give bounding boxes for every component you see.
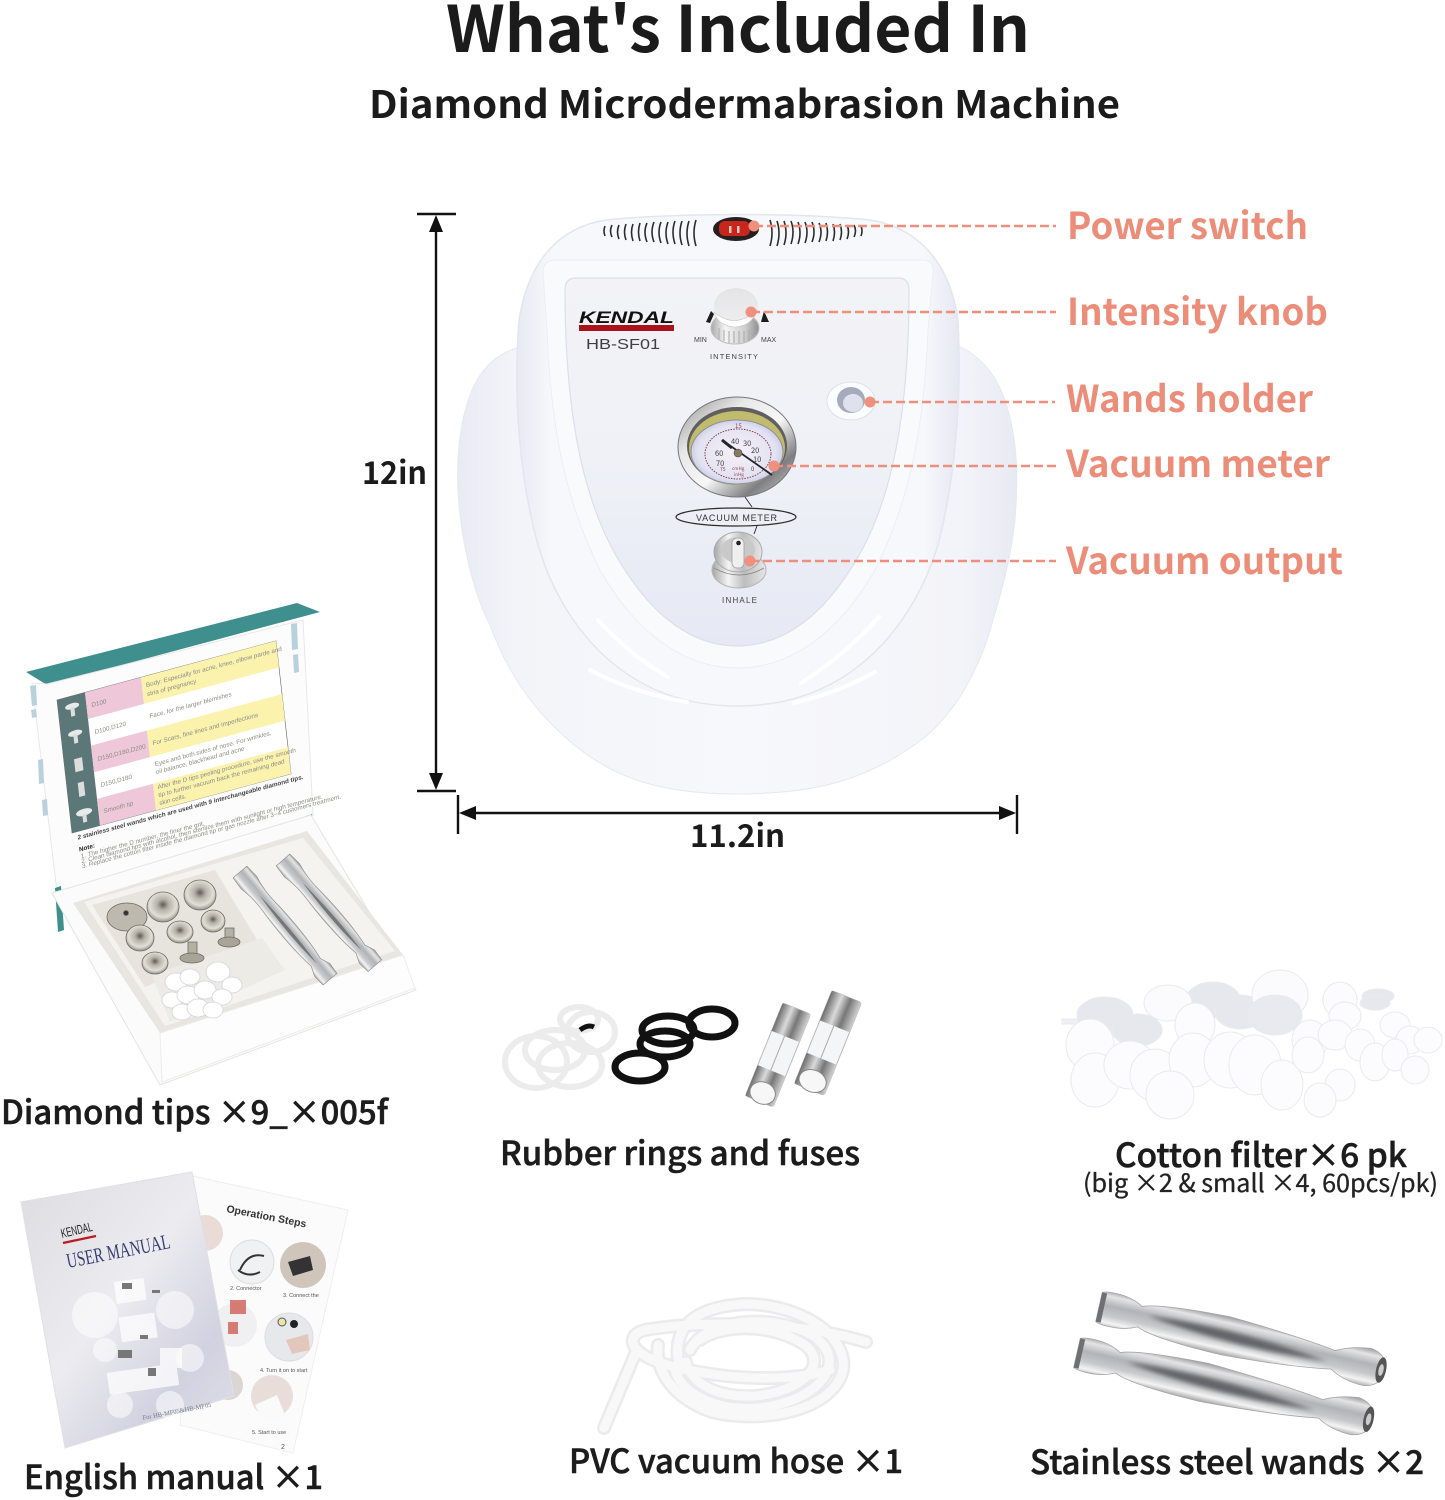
rubber rings and fuses bbox=[505, 991, 862, 1109]
box lid bbox=[26, 603, 342, 932]
small cotton filters in box bbox=[162, 962, 242, 1020]
callout: vacuum output: Vacuum output bbox=[1065, 531, 1343, 585]
usage table: tip to further vacuum back the remaining dead bbox=[158, 758, 285, 799]
usage table: Body: Especially for acne, knee, elbow parde and bbox=[146, 646, 283, 689]
label: rubber rings and fuses: Rubber rings and fuses bbox=[500, 1127, 860, 1175]
usage table: D150,D180 bbox=[100, 774, 133, 789]
operation steps page: 2 bbox=[281, 1444, 285, 1451]
callout: vacuum output bbox=[744, 531, 1343, 585]
dimension: height 12in: 12in bbox=[362, 448, 427, 493]
clear rubber rings bbox=[505, 1007, 615, 1088]
usage table: 2. Clean diamond tips with alcohol, then sterilize them with sunlight or high temperature. bbox=[81, 793, 323, 865]
callout: vacuum meter bbox=[768, 434, 1331, 488]
user manual cover: KENDAL bbox=[59, 1219, 94, 1241]
usage table bbox=[57, 628, 342, 872]
vacuum output nozzle bbox=[712, 532, 766, 605]
callout: intensity knob: Intensity knob bbox=[1067, 282, 1328, 336]
vacuum output nozzle: INHALE bbox=[722, 596, 757, 605]
diamond tips set bbox=[107, 880, 240, 974]
user manual cover bbox=[21, 1172, 234, 1448]
label: cotton filter: Cotton filter×6 pk bbox=[1115, 1129, 1407, 1177]
panel bezel bbox=[543, 260, 933, 668]
control panel face bbox=[565, 278, 909, 646]
power switch bbox=[713, 217, 759, 241]
vacuum meter gauge: 75 bbox=[720, 466, 726, 473]
callout: wands holder bbox=[864, 369, 1314, 423]
wand 1 bbox=[1095, 1288, 1390, 1391]
vacuum meter gauge: 60 bbox=[715, 448, 723, 459]
english manual bbox=[21, 1172, 348, 1453]
usage table: stria of pregnancy bbox=[147, 678, 198, 698]
usage table: 3. Replace the cotton filter inside the diamond tip or gas nozzle after 3~4 customers treatment. bbox=[82, 794, 342, 870]
dimension: width 11.2in: 11.2in bbox=[690, 811, 785, 856]
dimension: height 12in bbox=[362, 214, 456, 791]
label: cotton filter detail: (big ×2 & small ×4, 60pcs/pk) bbox=[1083, 1164, 1438, 1200]
cotton filters pile bbox=[1062, 970, 1442, 1119]
vacuum meter gauge: cmHg bbox=[732, 466, 745, 472]
brand logo: KENDAL bbox=[579, 308, 674, 327]
vacuum meter gauge: 40 bbox=[731, 436, 739, 447]
vacuum meter gauge: 30 bbox=[743, 438, 751, 449]
machine base bbox=[458, 340, 1017, 794]
usage table: skin cells. bbox=[159, 793, 187, 807]
callout: power switch: Power switch bbox=[1067, 196, 1308, 250]
dimension: width 11.2in bbox=[458, 795, 1017, 856]
operation steps page: 2. Connector bbox=[230, 1286, 262, 1292]
vacuum meter gauge: 20 bbox=[751, 445, 759, 456]
usage table: Smooth tip bbox=[103, 800, 134, 815]
glass fuses bbox=[745, 991, 862, 1109]
brand logo bbox=[579, 308, 674, 353]
intensity knob: MAX bbox=[761, 337, 776, 344]
usage table: Face, for the larger blemishes bbox=[149, 691, 232, 720]
usage table: D100,D120 bbox=[94, 721, 127, 736]
operation steps page: 5. Start to use bbox=[252, 1430, 286, 1436]
top vent slots bbox=[604, 220, 862, 246]
usage table: 1. The higher the D number, the finer the grit. bbox=[81, 820, 205, 860]
vacuum meter gauge: 10 bbox=[753, 454, 761, 465]
body highlights bbox=[590, 617, 879, 703]
usage table: 2 stainless steel wands which are used with 9 interchangeable diamond tips. bbox=[77, 774, 304, 842]
subtitle: Diamond Microdermabrasion Machine bbox=[369, 74, 1120, 129]
callout: intensity knob bbox=[746, 282, 1328, 336]
callout: vacuum meter: Vacuum meter bbox=[1065, 434, 1331, 488]
label: pvc vacuum hose: PVC vacuum hose ×1 bbox=[569, 1435, 903, 1483]
intensity knob: INTENSITY bbox=[710, 352, 758, 361]
vacuum meter gauge bbox=[678, 397, 796, 497]
two steel wands in box bbox=[232, 853, 382, 986]
brand logo: HB-SF01 bbox=[586, 336, 660, 353]
vacuum meter label: VACUUM METER bbox=[696, 513, 778, 523]
usage table: D150,D180,D200 bbox=[97, 743, 146, 763]
label: english manual: English manual ×1 bbox=[24, 1451, 323, 1499]
operation steps page: 3. Connect the bbox=[283, 1293, 319, 1299]
operation steps page: Operation Steps bbox=[225, 1203, 307, 1230]
usage table: Note: bbox=[79, 842, 95, 854]
callout: power switch bbox=[748, 196, 1308, 250]
vacuum meter gauge: 70 bbox=[716, 458, 724, 469]
vacuum meter label bbox=[676, 497, 796, 534]
intensity knob: MIN bbox=[694, 337, 707, 344]
vacuum meter gauge: 0 bbox=[751, 464, 755, 473]
wands holder bbox=[827, 382, 875, 420]
user manual cover: USER MANUAL bbox=[64, 1229, 172, 1273]
vacuum meter gauge: 15 bbox=[735, 421, 742, 430]
machine upper body bbox=[517, 214, 959, 706]
machine: microdermabrasion device bbox=[458, 214, 1017, 794]
usage table: For Scars, fine lines and imperfections bbox=[152, 712, 258, 747]
diamond tips gift box bbox=[26, 603, 416, 1085]
label: stainless steel wands: Stainless steel wands ×2 bbox=[1030, 1436, 1424, 1484]
usage table: oil balance, blackhead and acne bbox=[156, 745, 245, 776]
black rubber rings bbox=[580, 1009, 735, 1081]
box tray bbox=[52, 815, 416, 1085]
usage table: Eyes and both sides of nose. For wrinkles, bbox=[155, 730, 272, 768]
stainless steel wands bbox=[1073, 1288, 1390, 1440]
operation steps page bbox=[180, 1176, 348, 1453]
label: diamond tips: Diamond tips ×9_×005f bbox=[1, 1086, 390, 1134]
usage table: D100 bbox=[91, 698, 107, 709]
callout: wands holder: Wands holder bbox=[1066, 369, 1314, 423]
intensity knob bbox=[694, 288, 776, 361]
operation steps page: 4. Turn it on to start bbox=[260, 1368, 308, 1374]
wand 2 bbox=[1073, 1334, 1378, 1440]
usage table: After the D tips peeling procedure, use the smooth bbox=[157, 747, 297, 791]
pvc vacuum hose bbox=[604, 1304, 866, 1428]
vacuum meter gauge: inHg bbox=[734, 471, 744, 478]
user manual cover: For HB-MF05&HB-MF05 bbox=[142, 1402, 212, 1422]
